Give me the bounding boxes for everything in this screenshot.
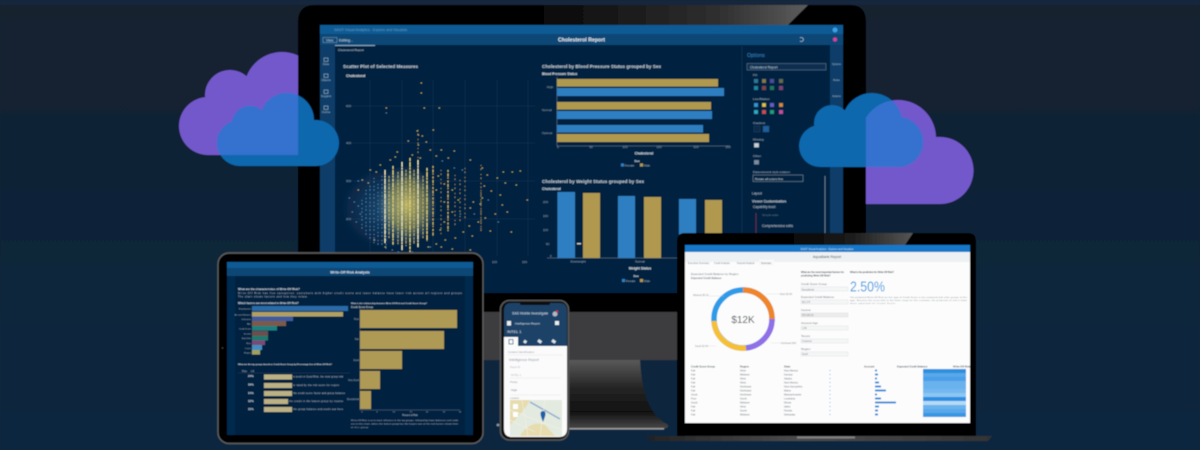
phone screen: Incident Identification — [508, 350, 535, 354]
data table: Midwest — [740, 372, 750, 376]
data table: Credit Score Group — [691, 364, 715, 368]
donut chart: Expected Credit Balance by Region — [691, 272, 739, 276]
data table: West — [740, 376, 746, 380]
credit score bar chart — [347, 308, 462, 417]
key groups list: the credit in the lowest group by income — [289, 400, 344, 403]
factor bars: Rate — [246, 342, 252, 345]
scatter plot: 100 — [492, 260, 497, 264]
data table: Northeast — [740, 392, 752, 396]
options panel: Comprehensive edits — [762, 224, 793, 228]
prediction — [850, 271, 968, 305]
laptop screen: Summary — [761, 262, 772, 265]
report tab — [335, 45, 375, 52]
data table: Good — [691, 392, 698, 396]
options panel: Capability level: — [753, 205, 776, 209]
factor bars — [235, 306, 348, 354]
factors column: $75,000.00 — [802, 315, 814, 317]
factors column: Customer — [802, 340, 812, 343]
scatter plot: 300 — [346, 179, 351, 183]
color swatches — [754, 79, 783, 164]
data table: Illinois — [784, 400, 792, 404]
horizontal bar chart: blood pressure: Cholesterol — [635, 152, 653, 156]
donut chart: Midwest $5.1K — [693, 294, 709, 297]
data table: Poor — [691, 396, 697, 400]
data table: Fair — [691, 368, 696, 372]
map pin — [540, 411, 546, 422]
data table: Idaho — [784, 404, 791, 408]
credit score bar chart: 30 — [459, 412, 462, 414]
options panel: Data element style rotation: — [753, 170, 791, 174]
factors column: What are the most important factors for — [801, 271, 844, 274]
vertical bar chart: weight status: Normal — [635, 260, 645, 264]
options panel: Line/Marker: — [753, 97, 770, 101]
heat column — [923, 369, 966, 417]
data table: Alaska — [784, 376, 792, 380]
horizontal bar chart: blood pressure: 200 — [693, 145, 699, 149]
prediction: type. Because this score falls in the lower range for this customer, the prediction of risk is lower — [850, 299, 967, 302]
key groups list: 19% — [248, 382, 254, 386]
phone screen: INTEL 1 — [507, 329, 522, 334]
monitor frame — [298, 5, 866, 312]
horizontal bar chart: blood pressure: 250 — [725, 145, 731, 149]
data table: Florida — [784, 408, 792, 412]
options panel: Gradient: — [753, 121, 766, 125]
data table: South — [740, 396, 747, 400]
credit score bar chart: 20 — [426, 412, 429, 414]
data table: Nebraska — [784, 412, 796, 416]
right rail — [830, 45, 843, 293]
horizontal bar chart: blood pressure: 50 — [589, 145, 593, 149]
factor bars: Loans — [245, 348, 252, 350]
options panel: Other: — [753, 154, 762, 158]
left rail: Suggest — [321, 94, 331, 98]
tablet — [218, 253, 483, 444]
credit score bar chart: Exceptional — [347, 398, 359, 401]
left rail: Outline — [322, 110, 331, 114]
data table: New Mexico — [784, 380, 799, 384]
vertical bar chart: weight status: 50 — [546, 242, 550, 246]
data table: Midwest — [740, 412, 750, 416]
screen toolbar: Cholesterol Report — [558, 38, 605, 44]
horizontal bar chart: blood pressure: 100 — [622, 145, 628, 149]
data table: Louisiana — [784, 396, 796, 400]
options panel: Simple edits — [762, 213, 779, 217]
laptop screen — [685, 245, 971, 423]
options panel: Missing: — [753, 138, 764, 142]
donut chart: South $3.4K — [695, 345, 709, 348]
tablet screen: Which factors are most related to Write-Off Risk? — [238, 301, 299, 305]
tablet screen: use in this chart, where the lowest group has the largest rate of the risk factors shown here — [351, 422, 459, 426]
horizontal bar chart: blood pressure: Sex — [634, 159, 640, 163]
data table: Region — [740, 364, 749, 368]
key groups list: Lift — [251, 370, 255, 373]
donut chart: Expected Credit Balance — [691, 276, 722, 280]
data table: Fair — [691, 372, 696, 376]
factors column: predicting Write-Off Risk? — [801, 274, 831, 278]
phone screen: Intelligence Report — [515, 322, 540, 326]
horizontal bar chart: blood pressure: Blood Pressure Status — [542, 72, 578, 76]
data table: State — [784, 364, 791, 368]
right rail: Rules — [833, 109, 841, 113]
factor bars: Bad Debt — [242, 337, 251, 340]
tablet screen: What are the characteristics of Write-Off Risk? — [238, 287, 300, 291]
legend: Female — [626, 279, 636, 283]
data table: Fair — [691, 384, 696, 388]
options panel: Layout — [752, 192, 762, 196]
factors column: Exceptional — [802, 288, 814, 292]
donut chart — [691, 272, 797, 348]
tablet screen: Write-Off Risk is at its most influence in the top groups, followed by lower balances and credit — [351, 419, 458, 422]
data table: New Mexico — [784, 368, 799, 372]
options panel: Cholesterol Report — [750, 66, 778, 70]
phone screen: SAS Mobile Investigate — [512, 312, 548, 316]
prediction: when adjusted for Credit Score. — [850, 302, 896, 305]
key groups list: 12% — [248, 399, 254, 403]
tablet screen: Credit Score Group — [351, 306, 374, 309]
key groups list: 11% — [248, 407, 254, 411]
data table: South — [740, 408, 747, 412]
phone screen: High — [511, 388, 518, 392]
legend: Female — [625, 164, 635, 168]
cloud: blue left — [216, 92, 340, 167]
horizontal bar chart: blood pressure: Normal — [542, 108, 552, 112]
data table: Massachusetts — [784, 392, 802, 396]
options panel: Rotate all colors first — [755, 177, 783, 181]
data table: Fair — [691, 404, 696, 408]
tablet screen: What are the top groups based on Credit Score Group by Percentage Use of Write-Off Risk? — [238, 363, 333, 366]
data table: Good — [691, 400, 698, 404]
legend: Male — [644, 164, 651, 168]
factors column: Income — [801, 308, 811, 312]
credit score bar chart: Good — [353, 360, 360, 362]
phone screen: Report ID — [510, 366, 521, 369]
phone screen: Intelligence Report — [509, 358, 539, 362]
phone screen — [504, 302, 567, 437]
data table: Kansas — [784, 372, 793, 376]
screen toolbar — [320, 34, 843, 45]
vertical bar chart: weight status: 150 — [543, 214, 548, 218]
factors column: $12,175 — [802, 302, 811, 304]
vertical bar chart: weight status — [542, 179, 735, 283]
factors column: Expected Credit Balance — [801, 295, 834, 299]
key groups list: is rated by the risk score for region — [293, 384, 340, 387]
laptop — [645, 233, 992, 441]
phone — [497, 300, 568, 440]
report title: AquaBank Report — [813, 255, 841, 259]
data table: Expected Credit Balance — [897, 364, 928, 368]
tablet screen: The chart shows factors and how they relate. — [238, 296, 308, 298]
data table: West — [740, 380, 746, 384]
horizontal bar chart: blood pressure: 150 — [656, 145, 662, 149]
laptop screen: Credit Analysis — [714, 262, 731, 265]
data table: Account — [864, 364, 875, 368]
data table — [691, 364, 971, 417]
credit score bar chart: 10 — [393, 412, 396, 414]
monitor stand neck — [298, 312, 866, 360]
key groups list: 14% — [248, 391, 254, 395]
key groups list — [238, 370, 350, 412]
vertical bar chart: weight status: 100 — [543, 228, 548, 232]
factors column: Tenure — [801, 334, 811, 338]
monitor — [298, 5, 866, 430]
credit score bar chart: Poor — [354, 318, 359, 321]
chart title: Cholesterol by Weight Status grouped by Sex — [542, 179, 644, 184]
key groups list: 24% — [248, 374, 254, 378]
prediction value: 2.50% — [850, 278, 885, 296]
data table: West — [740, 404, 746, 408]
vertical bar chart: weight status: Sex — [633, 274, 639, 278]
laptop screen: Executive Summary — [688, 262, 710, 265]
data table: Maine — [784, 388, 792, 392]
legend — [622, 279, 651, 283]
donut chart: $12K — [731, 315, 755, 326]
prediction: The predicted Write-Off Risk for this type of Credit Score is low compared with other groups of this — [850, 296, 968, 299]
credit score bar chart: Percent of Risk — [402, 414, 419, 417]
data table: Midwest — [740, 400, 750, 404]
phone tabs — [504, 337, 567, 346]
vertical bar chart: weight status: 0 — [550, 254, 552, 258]
factors column: South — [802, 353, 809, 356]
tablet screen — [227, 262, 473, 435]
scatter plot: 400 — [346, 141, 351, 145]
options panel: Fill: — [753, 73, 758, 77]
vertical bar chart: weight status: Cholesterol — [542, 187, 561, 191]
horizontal bar chart: blood pressure — [542, 64, 731, 168]
cloud: blue right — [798, 92, 924, 168]
options heading: Options — [747, 53, 765, 59]
credit score bar chart: Very Good — [348, 379, 360, 382]
tablet title: Write-Off Risk Analysis — [330, 270, 370, 274]
right rail: Ranks — [833, 141, 841, 145]
factor bars: Income — [244, 334, 252, 336]
right rail: Roles — [833, 78, 841, 82]
left rail — [320, 45, 335, 293]
data table: West — [740, 368, 746, 372]
scatter plot — [338, 64, 535, 264]
legend: Male — [644, 279, 651, 283]
credit score bar chart: 25 — [443, 412, 446, 414]
monitor screen — [320, 25, 843, 293]
tablet screen: What is the relationship between Write-Off Risk and Credit Score Group? — [351, 302, 428, 305]
credit score bar chart: Fair — [355, 338, 359, 341]
prediction: What is the prediction for Write-Off Risk? — [850, 271, 895, 274]
screen toolbar: View — [326, 38, 334, 42]
screen top bar: SAS® Visual Analytics - Explore and Visualize — [334, 28, 407, 32]
left rail: Objects — [321, 78, 331, 82]
key groups list: the credit score factor and group balance — [293, 392, 346, 395]
data table: Write-Off Risk — [953, 364, 971, 368]
credit score bar chart: 15 — [410, 412, 413, 414]
vertical bar chart: weight status: Weight Status — [629, 266, 651, 270]
donut chart: Northeast $4K — [781, 342, 797, 345]
credit score bar chart: 0 — [361, 412, 363, 414]
data table: Fair — [691, 408, 696, 412]
tablet screen: of this group. — [351, 426, 369, 429]
report tab: Cholesterol Report — [338, 48, 364, 52]
laptop base — [645, 436, 992, 441]
chart title: Cholesterol by Blood Pressure Status grouped by Sex — [542, 64, 661, 69]
factor bars: Age — [247, 322, 252, 326]
screen toolbar: Editing... — [339, 38, 353, 42]
scatter title: Scatter Plot of Selected Measures — [343, 64, 418, 69]
vertical bar chart: weight status: 200 — [543, 200, 548, 204]
credit score bar chart: 5 — [376, 412, 378, 414]
factors column — [801, 271, 848, 356]
factor bars: Credit Score — [239, 328, 252, 330]
screen top bar — [320, 25, 843, 34]
factors column: Region — [801, 347, 811, 351]
data table: Fair — [691, 388, 696, 392]
key groups list: the group balance and credit use here — [293, 408, 344, 411]
data table: Northeast — [740, 384, 752, 388]
map — [510, 400, 562, 436]
factor bars: Employment — [239, 308, 251, 310]
cloud: purple left — [178, 51, 299, 156]
data table: Fair — [691, 376, 696, 380]
horizontal bar chart: blood pressure: Optimal — [542, 131, 553, 135]
horizontal bar chart: blood pressure: High — [547, 85, 554, 89]
right rail: Filters — [833, 125, 841, 129]
phone screen: Priority — [510, 381, 518, 384]
factor bars: Utilization — [242, 318, 252, 321]
monitor stand base — [560, 360, 668, 429]
factors column: Account Age — [801, 321, 818, 325]
scatter plot: 150 — [522, 260, 527, 264]
right rail: Actions — [832, 94, 841, 98]
scatter plot: 600 — [346, 104, 351, 108]
vertical bar chart: weight status: Overweight — [570, 260, 586, 264]
data table: Northeast — [740, 388, 752, 392]
laptop screen: SAS® Visual Analytics - Explore and Visualize — [800, 247, 854, 251]
scatter plot: Cholesterol — [346, 74, 365, 78]
data table: New Hampshire — [784, 384, 803, 388]
tablet screen: Write-Off Risk has five categories: customers with higher credit score and lower balance have lower risk across all regions and groups. — [238, 292, 463, 295]
legend — [621, 164, 651, 168]
key groups list: Rate — [242, 370, 248, 373]
right rail: Options — [832, 62, 842, 66]
donut chart: West $3.9K — [780, 293, 793, 296]
factor bars: Region — [244, 352, 252, 354]
options panel — [742, 46, 826, 293]
factors column: Credit Score Group — [801, 282, 827, 286]
phone screen: INTEL 1 — [511, 373, 522, 377]
key groups list: is credit in Good Risk, the most group risk — [293, 376, 344, 378]
data table: Fair — [691, 412, 696, 416]
scatter plot: 200 — [346, 217, 351, 221]
cloud: purple right — [860, 100, 974, 204]
factor bars: Account Balance — [235, 314, 252, 316]
factors column: 1-99 — [802, 328, 807, 330]
phone screen: Location — [510, 397, 520, 400]
options panel: Viewer Customization — [752, 200, 786, 204]
data table: Fair — [691, 380, 696, 384]
blue scatter columns — [362, 176, 386, 250]
left rail: Data — [323, 62, 329, 66]
horizontal bar chart: blood pressure: 0 — [557, 145, 559, 149]
laptop screen: Deposit Analysis — [737, 262, 755, 265]
